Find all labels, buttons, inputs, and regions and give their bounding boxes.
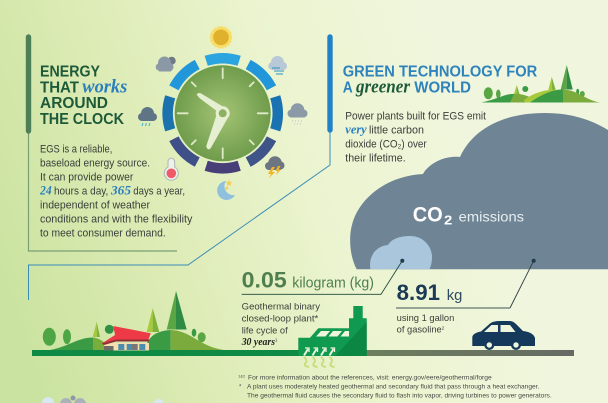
leader line: 8.91 kg [396, 259, 536, 308]
text block: using 1 gallon of gasoline [397, 313, 454, 335]
leader line: 0.05 kg [242, 259, 404, 294]
text block: EGS description: It can provide power [40, 172, 134, 184]
illustration: hills, trees and house [43, 291, 224, 350]
footnotes: For more information about the references, visit: energy.gov/eere/geothermal/forge [248, 375, 492, 381]
heading: green technology for a greener world: GREEN TECHNOLOGY FOR [343, 64, 538, 81]
footnotes: * [239, 384, 242, 390]
label: CO2 emissions [413, 203, 524, 227]
label: CO2 emissions: emissions [459, 210, 524, 225]
text block: EGS description: independent of weather [40, 200, 150, 212]
label: CO2 emissions: 2 [444, 212, 452, 227]
stat: 8.91 kg: 8.91 [397, 280, 440, 305]
footnotes: 1&2 [238, 374, 245, 378]
icons cropped at bottom edge [42, 396, 164, 403]
stat: 8.91 kg: kg [447, 287, 462, 304]
connector: left green bracket [28, 37, 177, 251]
icon: house [102, 326, 151, 350]
icon: geothermal power plant [298, 306, 367, 367]
text block: power plants: very [345, 122, 367, 136]
text block: EGS description: conditions and with the flexibility [40, 214, 193, 226]
heading: energy that works around the clock: works [82, 76, 127, 97]
icon: thermometer [164, 158, 178, 180]
icon: sun [210, 27, 232, 48]
steam arrows [304, 348, 334, 356]
clock [168, 58, 278, 168]
text block: EGS description: days a year, [133, 186, 185, 198]
text block: using 1 gallon of gasoline: of gasoline [397, 325, 442, 335]
icon: snow cloud [288, 103, 308, 124]
icon: car [472, 321, 535, 350]
text block: EGS description: hours a day, [54, 186, 108, 198]
text block: EGS description [39, 144, 193, 240]
text block: geothermal binary plant [241, 301, 320, 348]
text block: geothermal binary plant: life cycle of [242, 325, 288, 335]
stat: 0.05 kilogram: kilogram (kg) [292, 275, 374, 292]
icon: storm cloud [265, 156, 284, 178]
icon: rain cloud [138, 107, 157, 126]
large CO2 cloud [350, 113, 608, 269]
text block: power plants: little carbon [369, 124, 424, 136]
heading: energy that works around the clock: ENERGY [40, 64, 100, 81]
text block: power plants: Power plants built for EGS emit [345, 110, 486, 122]
heading: energy that works around the clock: AROUND [40, 95, 108, 112]
stat: 8.91 kg [397, 280, 462, 305]
text block: using 1 gallon of gasoline: using 1 gallon [397, 313, 454, 323]
text block: geothermal binary plant: 1 [275, 338, 278, 342]
text block: geothermal binary plant: closed-loop plant* [242, 313, 319, 323]
text block: geothermal binary plant: 30 years [241, 337, 275, 348]
text block: geothermal binary plant: Geothermal binary [242, 301, 320, 311]
text block: power plants: their lifetime. [345, 153, 406, 165]
connector: blue bracket line [28, 37, 330, 300]
heading: energy that works around the clock: THE CLOCK [40, 111, 124, 128]
heading: green technology for a greener world [343, 64, 538, 98]
stat: 0.05 kilogram [242, 268, 374, 293]
text block: EGS description: 24 [39, 183, 52, 198]
label: CO2 emissions: CO [413, 203, 443, 227]
heading: green technology for a greener world: WORLD [414, 80, 471, 97]
text block: EGS description: EGS is a reliable, [40, 144, 112, 156]
text block: EGS description: to meet consumer demand. [40, 228, 166, 240]
footnotes [238, 374, 552, 399]
heading: green technology for a greener world: greener [355, 77, 411, 98]
text block: power plants: dioxide (CO₂) over [345, 138, 427, 150]
icon: wind cloud [268, 56, 287, 74]
ground line [32, 350, 574, 356]
heading: energy that works around the clock: THAT [40, 79, 79, 96]
footnotes: A plant uses moderately heated geothermal and secondary fluid that pass through a heat exchanger. [247, 384, 540, 390]
small CO2 cloud [370, 236, 432, 269]
heading: energy that works around the clock [40, 64, 127, 128]
icon: cloud with sun [156, 56, 176, 72]
text block: power plants [345, 110, 486, 165]
text block: EGS description: 365 [110, 183, 132, 198]
illustration: small green hills and trees [481, 65, 600, 102]
footnotes: The geothermal fluid causes the secondary fluid to flash into vapor, driving turbines to power generators. [247, 393, 552, 399]
text block: using 1 gallon of gasoline: 2 [442, 326, 445, 330]
heading: green technology for a greener world: A [343, 80, 353, 97]
text block: EGS description: baseload energy source. [40, 158, 150, 170]
stat: 0.05 kilogram: 0.05 [242, 268, 287, 293]
icon: moon and stars [217, 180, 235, 200]
